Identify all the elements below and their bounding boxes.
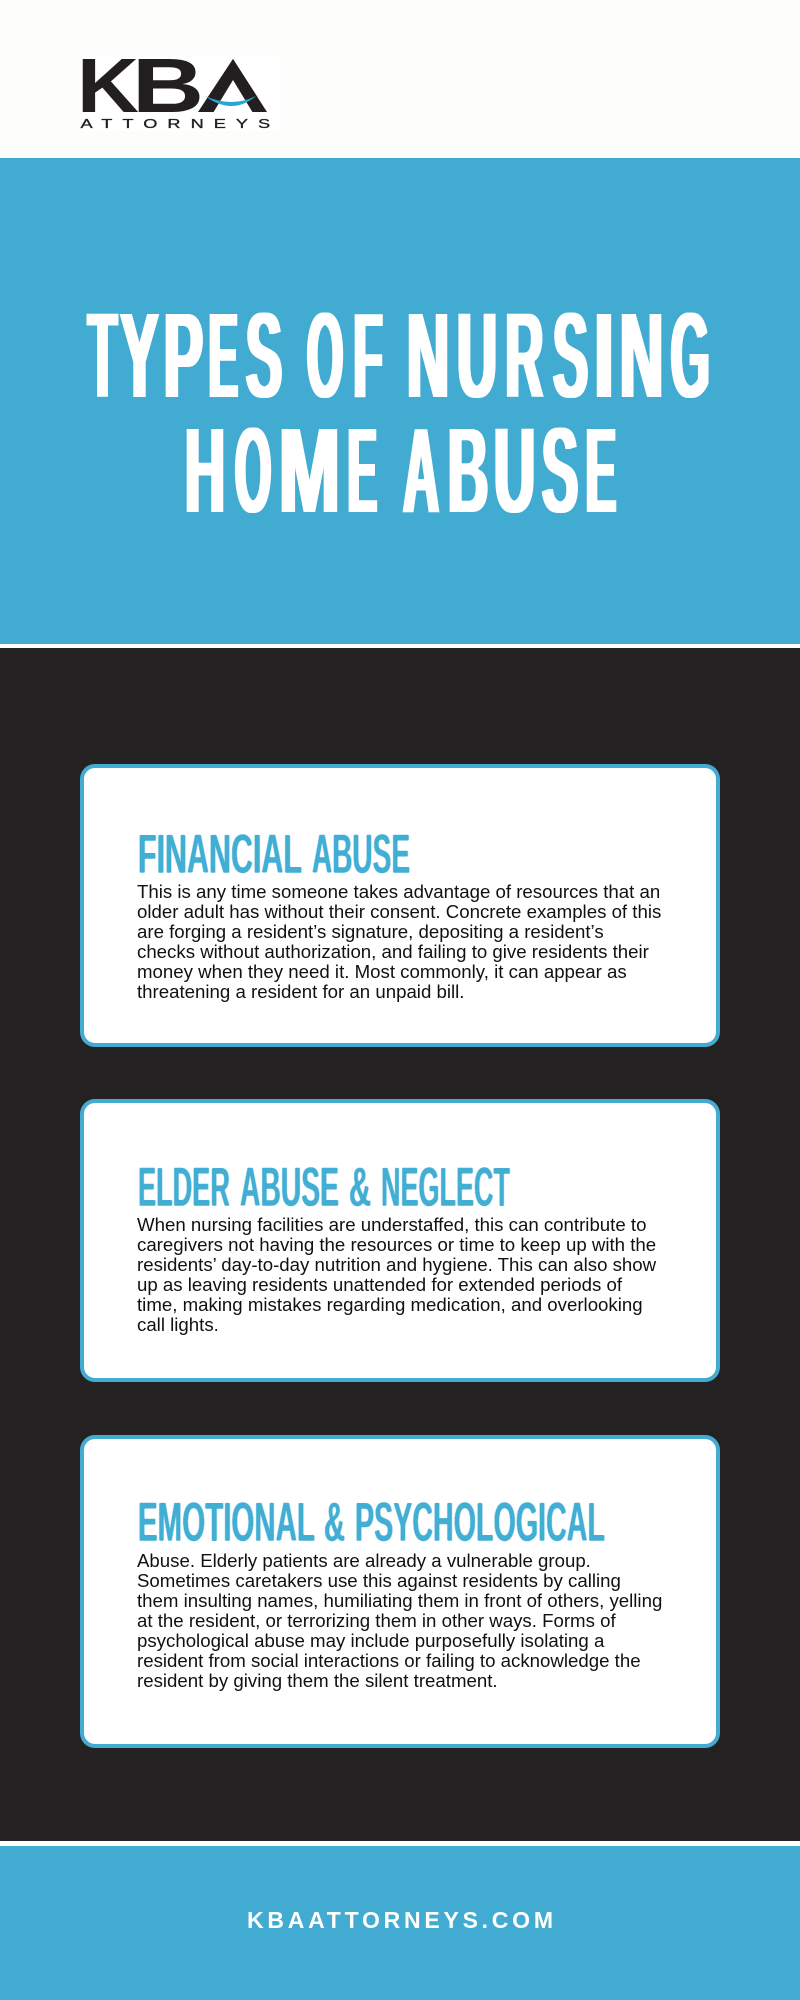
footer website: KBAATTORNEYS.COM [247, 1907, 553, 1933]
text: financial abuse: threatening a resident for an unpaid bill. [137, 981, 464, 1002]
panel: emotional and psychological abuse [82, 1437, 718, 1746]
heading: elder abuse and neglect: & [349, 1155, 371, 1218]
title: S [246, 287, 282, 425]
text: elder abuse and neglect: caregivers not having the resources or time to keep up with the [137, 1234, 656, 1255]
title: B [448, 402, 488, 540]
title: O [235, 402, 271, 540]
heading: financial abuse: FINANCIAL [138, 822, 302, 885]
text: financial abuse: This is any time someone takes advantage of resources that an [137, 881, 660, 902]
title: N [407, 287, 449, 425]
footer band [0, 1846, 800, 2000]
logo: KBA Attorneys [77, 43, 272, 131]
text: emotional and psychological: at the resident, or terrorizing them in other ways. Forms of [137, 1610, 616, 1631]
title: O [307, 287, 343, 425]
text: elder abuse and neglect: up as leaving residents unattended for extended periods of [137, 1274, 623, 1295]
text: emotional and psychological: resident from social interactions or failing to acknowledge the [137, 1650, 641, 1671]
text: elder abuse and neglect [137, 1214, 657, 1335]
title panel: G [671, 287, 710, 425]
panel: elder abuse and neglect: NEGLECT [381, 1155, 510, 1218]
logo: KBA Attorneys: K [77, 43, 139, 129]
logo: KBA Attorneys: A [198, 43, 267, 129]
heading: elder abuse and neglect: ABUSE [240, 1155, 339, 1218]
title: T [88, 287, 117, 425]
title: N [620, 287, 663, 425]
text: elder abuse and neglect: When nursing facilities are understaffed, this can contribute to [137, 1214, 646, 1235]
panel: financial abuse [82, 766, 718, 1045]
text: emotional and psychological [137, 1550, 662, 1691]
text: emotional and psychological: Abuse. Elderly patients are already a vulnerable group. [137, 1550, 591, 1571]
title: S [553, 287, 588, 425]
text: financial abuse: checks without authorization, and failing to give residents their [137, 941, 649, 962]
text: emotional and psychological: them insulting names, humiliating them in front of others, yelling [137, 1590, 662, 1611]
heading: emotional and psychological: & [324, 1490, 345, 1553]
title: P [164, 287, 203, 425]
text: financial abuse: money when they need it. Most commonly, it can appear as [137, 961, 627, 982]
text: financial abuse: older adult has without their consent. Concrete examples of this [137, 901, 661, 922]
heading: emotional and psychological: EMOTIONAL [138, 1490, 315, 1553]
logo: KBA Attorneys: ATTORNEYS [80, 117, 270, 131]
logo: KBA Attorneys: B [132, 43, 204, 129]
text: financial abuse: are forging a resident’s signature, depositing a resident’s [137, 921, 604, 942]
panel: elder abuse and neglect [82, 1101, 718, 1380]
title [88, 287, 710, 540]
heading: elder abuse and neglect [138, 1155, 510, 1218]
title: E [586, 402, 616, 540]
title: I [594, 287, 614, 425]
text: emotional and psychological: psychological abuse may include purposefully isolating a [137, 1630, 605, 1651]
title: M [279, 402, 340, 540]
panel: financial abuse: ABUSE [312, 822, 410, 885]
text: elder abuse and neglect: residents’ day-to-day nutrition and hygiene. This can also show [137, 1254, 657, 1275]
text: emotional and psychological: Sometimes caretakers use this against residents by calling [137, 1570, 621, 1591]
title: U [457, 287, 497, 425]
title: R [505, 287, 543, 425]
text: financial abuse [137, 881, 661, 1002]
header band with logo [0, 0, 800, 158]
title: U [494, 402, 535, 540]
title: E [348, 402, 377, 540]
title: Y [120, 287, 159, 425]
title: H [185, 402, 225, 540]
text: elder abuse and neglect: time, making mistakes regarding medication, and overlooking [137, 1294, 643, 1315]
title: F [354, 287, 382, 425]
title: A [403, 402, 439, 540]
title: S [542, 402, 578, 540]
text: emotional and psychological: resident by giving them the silent treatment. [137, 1670, 498, 1691]
heading: elder abuse and neglect: ELDER [138, 1155, 230, 1218]
text: elder abuse and neglect: call lights. [137, 1314, 219, 1335]
title panel [0, 158, 800, 644]
title: E [209, 287, 238, 425]
